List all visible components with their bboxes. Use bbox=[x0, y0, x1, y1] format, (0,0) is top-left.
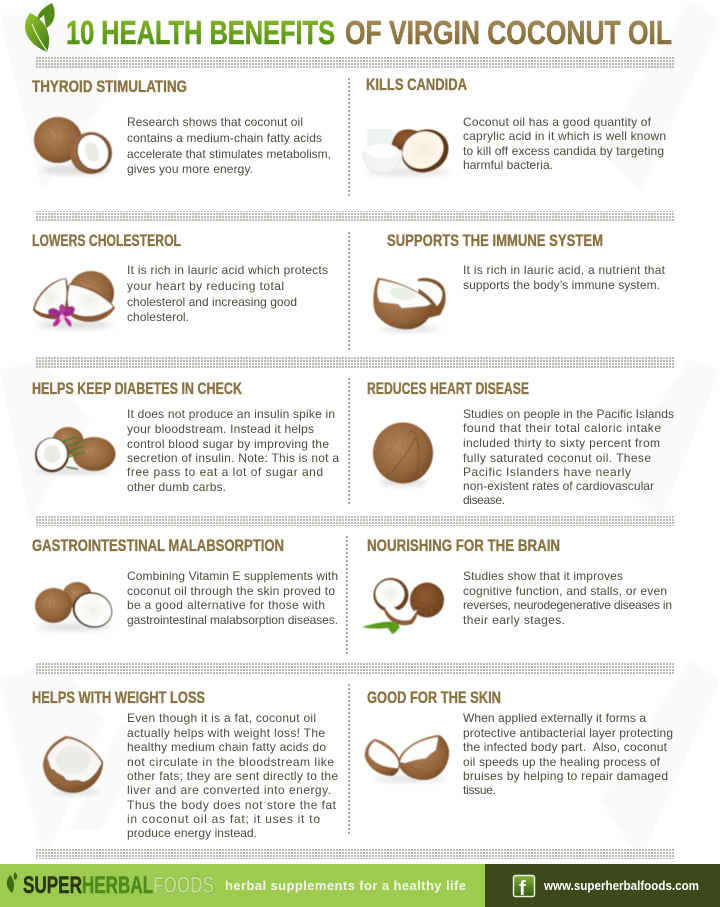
panel: reduces heart disease bbox=[367, 379, 674, 507]
panel: gastrointestinal malabsorption bbox=[32, 536, 338, 633]
icon: half coconut bbox=[43, 736, 103, 795]
text bbox=[463, 569, 672, 627]
text: non-existent rates of cardiovascular bbox=[463, 479, 654, 493]
text: found that their total caloric intake bbox=[463, 421, 661, 435]
icon: orchid bbox=[48, 304, 75, 327]
text: gives you more energy. bbox=[127, 162, 253, 176]
heading: LOWERS CHOLESTEROL bbox=[32, 231, 181, 250]
icon: coconut oil and flakes bbox=[363, 122, 456, 180]
logo text: SUPERHERBALFOODS bbox=[23, 872, 214, 899]
text: secretion of insulin. Note: This is not a bbox=[127, 451, 339, 465]
icon: coconuts with leaf bbox=[362, 578, 444, 634]
text: in coconut oil as fat; it uses it to bbox=[127, 812, 320, 826]
text bbox=[127, 115, 331, 176]
heading: SUPPORTS THE IMMUNE SYSTEM bbox=[387, 231, 603, 250]
text: not circulate in the bloodstream like bbox=[127, 755, 334, 769]
heading: GASTROINTESTINAL MALABSORPTION bbox=[32, 536, 284, 555]
footer bbox=[0, 864, 720, 907]
icon: coconuts with orchid bbox=[33, 271, 115, 329]
text: other dumb carbs. bbox=[127, 480, 226, 494]
text: control blood sugar by improving the bbox=[127, 437, 329, 451]
title bbox=[25, 3, 672, 52]
icon: logo leaf bbox=[7, 872, 17, 893]
text: contains a medium-chain fatty acids bbox=[127, 131, 322, 145]
text: to kill off excess candida by targeting bbox=[463, 144, 664, 158]
text: It is rich in lauric acid, a nutrient that bbox=[463, 263, 666, 277]
text bbox=[463, 263, 666, 292]
panel: helps keep diabetes in check bbox=[32, 379, 339, 494]
heading: NOURISHING FOR THE BRAIN bbox=[367, 536, 560, 555]
text: Studies show that it improves bbox=[463, 569, 623, 583]
text: healthy medium chain fatty acids do bbox=[127, 740, 326, 754]
logo bbox=[7, 872, 214, 899]
panel: kills candida bbox=[363, 75, 666, 180]
text: your heart by reducing total bbox=[127, 279, 284, 293]
icon: leaves bbox=[25, 3, 55, 52]
title text: green part: 10 HEALTH BENEFITS bbox=[66, 14, 335, 51]
heading: GOOD FOR THE SKIN bbox=[367, 688, 501, 707]
text: Even though it is a fat, coconut oil bbox=[127, 711, 316, 725]
icon: cracked coconut bbox=[373, 278, 446, 332]
heading: HELPS WITH WEIGHT LOSS bbox=[32, 688, 205, 707]
panel: helps with weight loss bbox=[32, 688, 338, 840]
text: actually helps with weight loss! The bbox=[127, 726, 325, 740]
text: liver and are converted into energy. bbox=[127, 783, 331, 797]
heading: THYROID STIMULATING bbox=[32, 77, 187, 96]
text bbox=[127, 711, 338, 840]
text: cholesterol and increasing good bbox=[127, 295, 297, 309]
text: other fats; they are sent directly to the bbox=[127, 769, 338, 783]
text: Studies on people in the Pacific Islands bbox=[463, 407, 674, 421]
panel: nourishing for the brain bbox=[362, 536, 672, 634]
icon: two coconut halves bbox=[365, 735, 449, 782]
text bbox=[127, 407, 339, 494]
icon: facebook: f bbox=[519, 878, 526, 900]
text: be a good alternative for those with bbox=[127, 598, 325, 612]
heading: REDUCES HEART DISEASE bbox=[367, 379, 529, 398]
text: included thirty to sixty percent from bbox=[463, 436, 660, 450]
text: their early stages. bbox=[463, 613, 565, 627]
text: reverses, neurodegenerative diseases in bbox=[463, 598, 672, 612]
panel: good for the skin bbox=[365, 688, 673, 797]
text: fully saturated coconut oil. These bbox=[463, 451, 651, 465]
text: Pacific Islanders have nearly bbox=[463, 465, 631, 479]
text: gastrointestinal malabsorption diseases. bbox=[127, 613, 338, 627]
text: Research shows that coconut oil bbox=[127, 115, 303, 129]
text: cognitive function, and stalls, or even bbox=[463, 584, 667, 598]
footer: dark band bbox=[485, 864, 720, 907]
heading: KILLS CANDIDA bbox=[366, 75, 467, 94]
icon: facebook bbox=[514, 876, 534, 900]
text: Thus the body does not store the fat bbox=[127, 798, 337, 812]
panel: lowers cholesterol bbox=[32, 231, 328, 329]
text: tissue. bbox=[463, 783, 496, 797]
text: Coconut oil has a good quantity of bbox=[463, 115, 652, 129]
text bbox=[463, 711, 673, 797]
website: www.superherbalfoods.com bbox=[543, 878, 699, 893]
text: supports the body’s immune system. bbox=[463, 278, 660, 292]
text: Combining Vitamin E supplements with bbox=[127, 569, 338, 583]
text: caprylic acid in it which is well known bbox=[463, 129, 666, 143]
footer: green band bbox=[0, 864, 485, 907]
text: disease. bbox=[463, 493, 505, 507]
text bbox=[127, 263, 328, 324]
text: oil speeds up the healing process of bbox=[463, 755, 661, 769]
panel: thyroid stimulating bbox=[32, 77, 331, 176]
text: harmful bacteria. bbox=[463, 158, 553, 172]
text: bruises by helping to repair damaged bbox=[463, 769, 668, 783]
text: free pass to eat a lot of sugar and bbox=[127, 465, 323, 479]
panel: supports the immune system bbox=[373, 231, 666, 332]
text bbox=[463, 407, 674, 507]
icon: coconuts bbox=[35, 582, 117, 633]
text: When applied externally it forms a bbox=[463, 711, 646, 725]
text: coconut oil through the skin proved to bbox=[127, 584, 335, 598]
icon: coconuts with fronds bbox=[34, 427, 116, 474]
heading: HELPS KEEP DIABETES IN CHECK bbox=[32, 379, 243, 398]
text bbox=[463, 115, 666, 172]
text: cholesterol. bbox=[127, 310, 189, 324]
text: your bloodstream. Instead it helps bbox=[127, 422, 314, 436]
text: protective antibacterial layer protecting bbox=[463, 726, 673, 740]
text: the infected body part. Also, coconut bbox=[463, 740, 668, 754]
icon: coconuts bbox=[34, 117, 114, 175]
icon: whole coconut bbox=[373, 422, 433, 486]
text: It is rich in lauric acid which protects bbox=[127, 263, 328, 277]
tagline: herbal supplements for a healthy life bbox=[225, 878, 466, 893]
text: accelerate that stimulates metabolism, bbox=[127, 147, 331, 161]
text bbox=[127, 569, 338, 627]
text: It does not produce an insulin spike in bbox=[127, 407, 335, 421]
text: produce energy instead. bbox=[127, 826, 257, 840]
